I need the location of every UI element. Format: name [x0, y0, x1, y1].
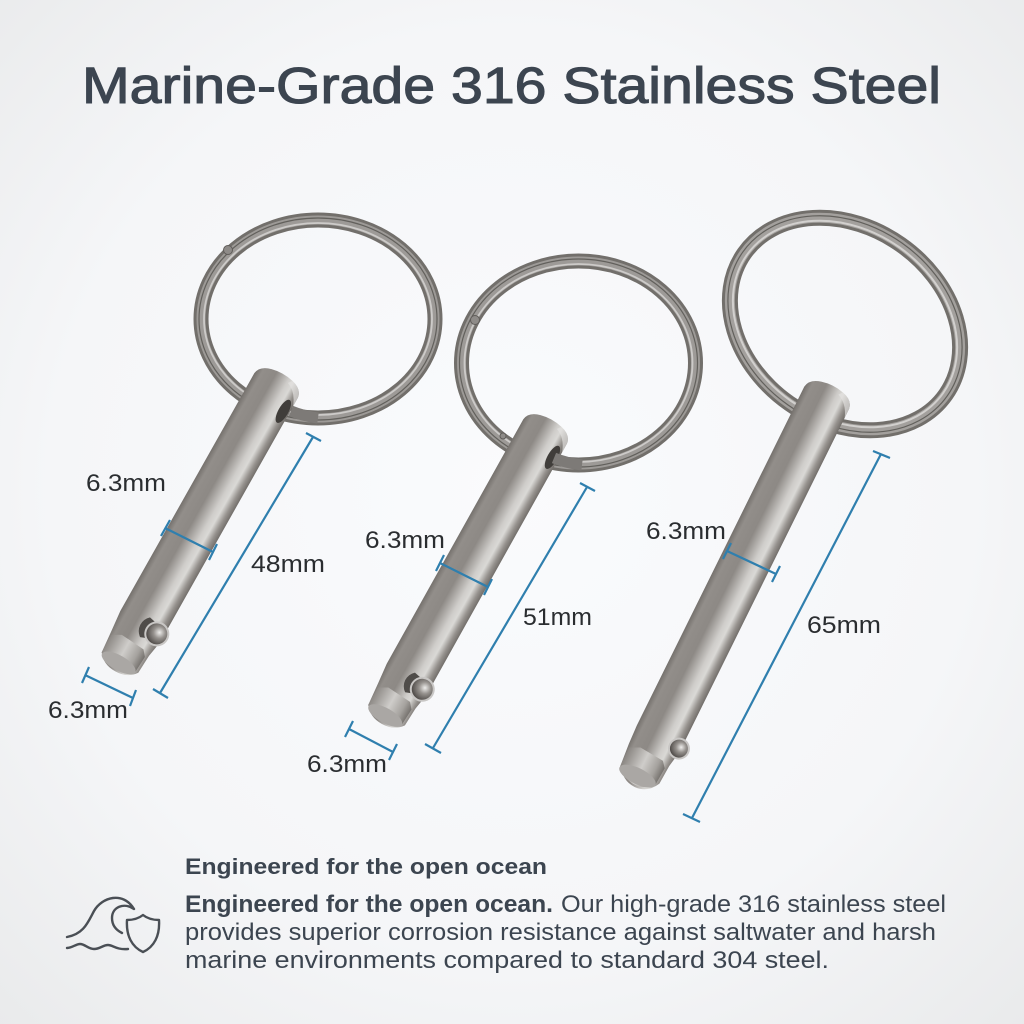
split ring 3: [686, 171, 1004, 477]
pin body 1: [93, 361, 309, 686]
body copy: marine environments compared to standard 304 steel.: [185, 947, 829, 974]
heading: Engineered for the open ocean: [185, 854, 547, 879]
ring wire through pin hole 2: [554, 458, 582, 465]
dimension labels: 6.3mm: [86, 470, 166, 497]
dimension labels: 6.3mm: [365, 527, 445, 554]
pin assembly: 65mm: [612, 171, 1004, 802]
dimension labels: 6.3mm: [646, 518, 726, 545]
dimension labels: 51mm: [523, 604, 592, 631]
text block: open ocean: [185, 854, 946, 974]
dimension lines: 65mm pin: [683, 451, 890, 822]
dimension lines: 48mm pin: [82, 433, 321, 706]
body copy: Our high-grade 316 stainless steel: [561, 891, 946, 918]
dimension labels: 48mm: [251, 551, 325, 578]
body copy: [185, 891, 946, 974]
dimension labels: 6.3mm: [48, 697, 128, 724]
dimension labels: [48, 470, 881, 778]
pin body 2: [360, 407, 579, 739]
pin assembly: 51mm: [360, 259, 698, 739]
icon: wave and shield: [67, 898, 159, 952]
pin body 3: [612, 375, 863, 802]
title: Marine-Grade 316 Stainless Steel: [82, 57, 941, 114]
dimension labels: 6.3mm: [307, 751, 387, 778]
ring wire through pin hole 1: [291, 411, 318, 418]
body copy: provides superior corrosion resistance against saltwater and harsh: [185, 919, 936, 946]
pin assembly: 48mm: [93, 218, 437, 686]
body copy: Engineered for the open ocean.: [185, 891, 553, 918]
dimension labels: 65mm: [807, 612, 881, 639]
dimension lines: 51mm pin: [345, 483, 595, 760]
split ring 2: [460, 259, 698, 467]
split ring 1: [199, 218, 437, 420]
